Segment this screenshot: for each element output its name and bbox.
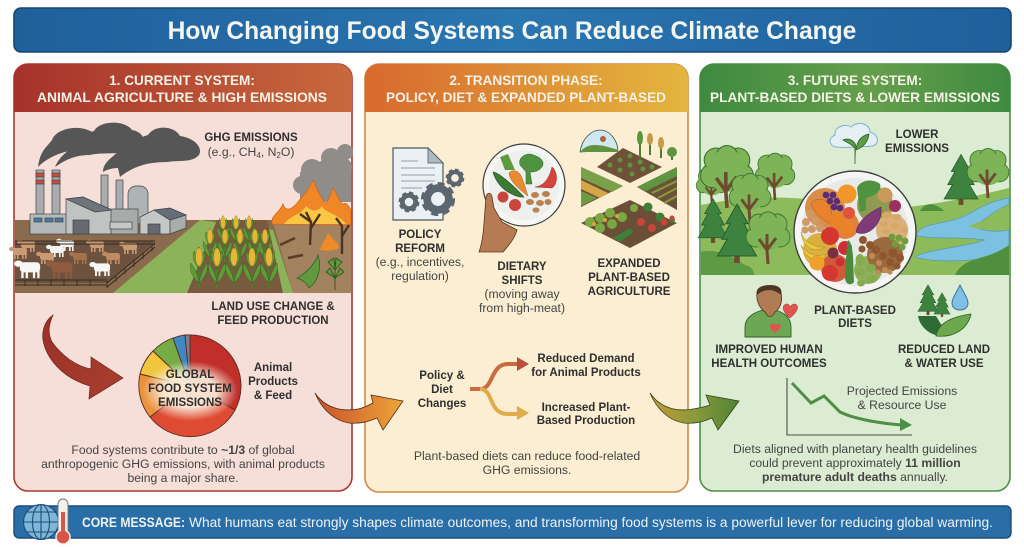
plate of plant-based foods <box>794 171 916 293</box>
icon: globe <box>24 504 58 540</box>
panel 2 header: POLICY, DIET & EXPANDED PLANT-BASED <box>386 90 666 105</box>
factory buildings <box>30 170 186 234</box>
label: land use change: LAND USE CHANGE & <box>211 301 335 313</box>
corn field <box>190 216 278 289</box>
panel 3 summary text: premature adult deaths annually. <box>762 470 948 484</box>
icon: expanded plant-based agriculture plots <box>580 130 677 248</box>
label: animal products and feed: & Feed <box>254 390 292 402</box>
label: improved health: HEALTH OUTCOMES <box>711 358 827 370</box>
label: animal products and feed: Animal <box>254 362 292 374</box>
label: plant-based diets <box>814 305 896 330</box>
panel: current system <box>9 64 353 491</box>
label: policy reform: REFORM <box>395 243 445 255</box>
label: dietary shifts: (moving away <box>484 287 560 301</box>
arrow: branch to increased production <box>480 389 529 420</box>
label: policy and diet changes <box>418 370 466 410</box>
label: GHG emissions: (e.g., CH <box>208 145 256 159</box>
label: policy reform <box>376 229 464 283</box>
label: land use change <box>211 301 335 327</box>
panel 1 summary text: being a major share. <box>127 471 239 485</box>
label: increased production: Increased Plant- <box>542 402 631 414</box>
panel 1 header: 1. CURRENT SYSTEM: <box>109 73 255 88</box>
label: reduced demand: for Animal Products <box>531 367 641 379</box>
label: GHG emissions: , N <box>261 145 276 159</box>
label: GHG emissions: GHG EMISSIONS <box>204 132 298 144</box>
icon: land and water <box>918 285 971 336</box>
feedlot cows <box>9 239 137 278</box>
label: dietary shifts <box>479 261 565 315</box>
arrow: panel 1 to panel 2 <box>315 393 403 430</box>
label: increased production <box>537 402 635 427</box>
panel 1 summary text: anthropogenic GHG emissions, with animal products <box>41 457 325 471</box>
wildfire smoke and flames <box>272 144 353 258</box>
pie chart centre label <box>148 369 232 409</box>
core message bar: What humans eat strongly shapes climate outcomes, and transforming food systems is a powerful lever for reducing global warming. <box>189 515 993 530</box>
label: animal products and feed <box>248 362 298 402</box>
label: reduced land and water: & WATER USE <box>904 358 984 370</box>
title banner: How Changing Food Systems Can Reduce Climate Change <box>168 18 856 45</box>
panel 2 header <box>365 64 688 112</box>
arrow: branch to reduced demand <box>470 357 529 389</box>
pie chart: global food system emissions <box>139 335 241 437</box>
label: expanded plant-based agriculture: AGRICULTURE <box>588 286 671 298</box>
label: improved health <box>711 344 827 370</box>
icon: plate held by hand <box>479 144 565 252</box>
feedlot fence <box>15 241 155 288</box>
panel 3 header: 3. FUTURE SYSTEM: <box>788 73 922 88</box>
panel 2 header: 2. TRANSITION PHASE: <box>449 73 603 88</box>
label: dietary shifts: SHIFTS <box>502 275 543 287</box>
label: lower emissions: LOWER <box>896 129 939 141</box>
illustration: factory farm and land use scene <box>9 123 353 293</box>
icon: healthy person with hearts <box>745 285 798 337</box>
panel 3 header <box>700 64 1010 112</box>
label: land use change: FEED PRODUCTION <box>217 315 329 327</box>
label: reduced land and water <box>898 344 990 370</box>
icon: policy document with gears <box>393 148 463 220</box>
label: GHG emissions: O) <box>281 145 294 159</box>
smoke clouds from factory <box>38 123 200 177</box>
label: GHG emissions: 2 <box>276 151 281 160</box>
panel 3 summary text: could prevent approximately 11 million <box>749 456 961 470</box>
core message bar: CORE MESSAGE: <box>82 515 185 530</box>
pea pods and seedling <box>297 255 344 290</box>
pie chart centre label: EMISSIONS <box>158 397 222 409</box>
arrow: into pie chart <box>43 315 123 399</box>
label: expanded plant-based agriculture <box>588 258 671 298</box>
label: lower emissions: EMISSIONS <box>885 143 949 155</box>
label: reduced demand <box>531 353 641 379</box>
panel 2 summary text: GHG emissions. <box>483 463 571 477</box>
panel 1 header <box>14 64 352 112</box>
label: projected emissions <box>847 384 957 412</box>
label: improved health: IMPROVED HUMAN <box>715 344 823 356</box>
label: reduced land and water: REDUCED LAND <box>898 344 990 356</box>
panel: transition phase <box>365 64 688 492</box>
pie chart centre label: FOOD SYSTEM <box>148 383 232 395</box>
label: policy and diet changes: Changes <box>418 398 466 410</box>
label: policy reform: (e.g., incentives, <box>376 255 464 269</box>
panel 1 summary text <box>41 443 325 485</box>
label: animal products and feed: Products <box>248 376 298 388</box>
label: policy reform: POLICY <box>399 229 442 241</box>
arrow: panel 2 to panel 3 <box>650 393 739 430</box>
panel 2 summary text: Plant-based diets can reduce food-related <box>414 449 640 463</box>
pie chart centre label: GLOBAL <box>166 369 214 381</box>
label: projected emissions: & Resource Use <box>858 398 947 412</box>
label: projected emissions: Projected Emissions <box>847 384 957 398</box>
label: increased production: Based Production <box>537 415 635 427</box>
label: lower emissions <box>885 129 949 155</box>
chart: projected emissions <box>787 378 912 435</box>
panel: future system <box>696 64 1010 491</box>
panel 1 header: ANIMAL AGRICULTURE & HIGH EMISSIONS <box>37 90 327 105</box>
core message bar <box>14 506 1011 538</box>
panel 3 header: PLANT-BASED DIETS & LOWER EMISSIONS <box>710 90 1000 105</box>
panel 2 summary text <box>414 449 640 477</box>
label: expanded plant-based agriculture: PLANT-BASED <box>588 272 670 284</box>
label: expanded plant-based agriculture: EXPANDED <box>597 258 661 270</box>
label: dietary shifts: DIETARY <box>497 261 547 273</box>
label: plant-based diets: PLANT-BASED <box>814 305 896 317</box>
label: GHG emissions <box>204 132 298 160</box>
icon: thermometer <box>56 499 70 544</box>
label: policy reform: regulation) <box>391 269 449 283</box>
panel 3 summary text <box>733 442 977 484</box>
title banner <box>14 8 1011 52</box>
illustration: forest and river landscape <box>696 146 1009 275</box>
label: reduced demand: Reduced Demand <box>537 353 635 365</box>
label: policy and diet changes: Policy & <box>419 370 465 382</box>
icon: cloud with sprout <box>830 123 877 164</box>
label: GHG emissions: 4 <box>256 151 261 160</box>
label: policy and diet changes: Diet <box>431 384 453 396</box>
label: dietary shifts: from high-meat) <box>479 301 565 315</box>
label: plant-based diets: DIETS <box>838 318 872 330</box>
panel 1 summary text: Food systems contribute to ~1/3 of global <box>71 443 295 457</box>
panel 3 summary text: Diets aligned with planetary health guidelines <box>733 442 977 456</box>
